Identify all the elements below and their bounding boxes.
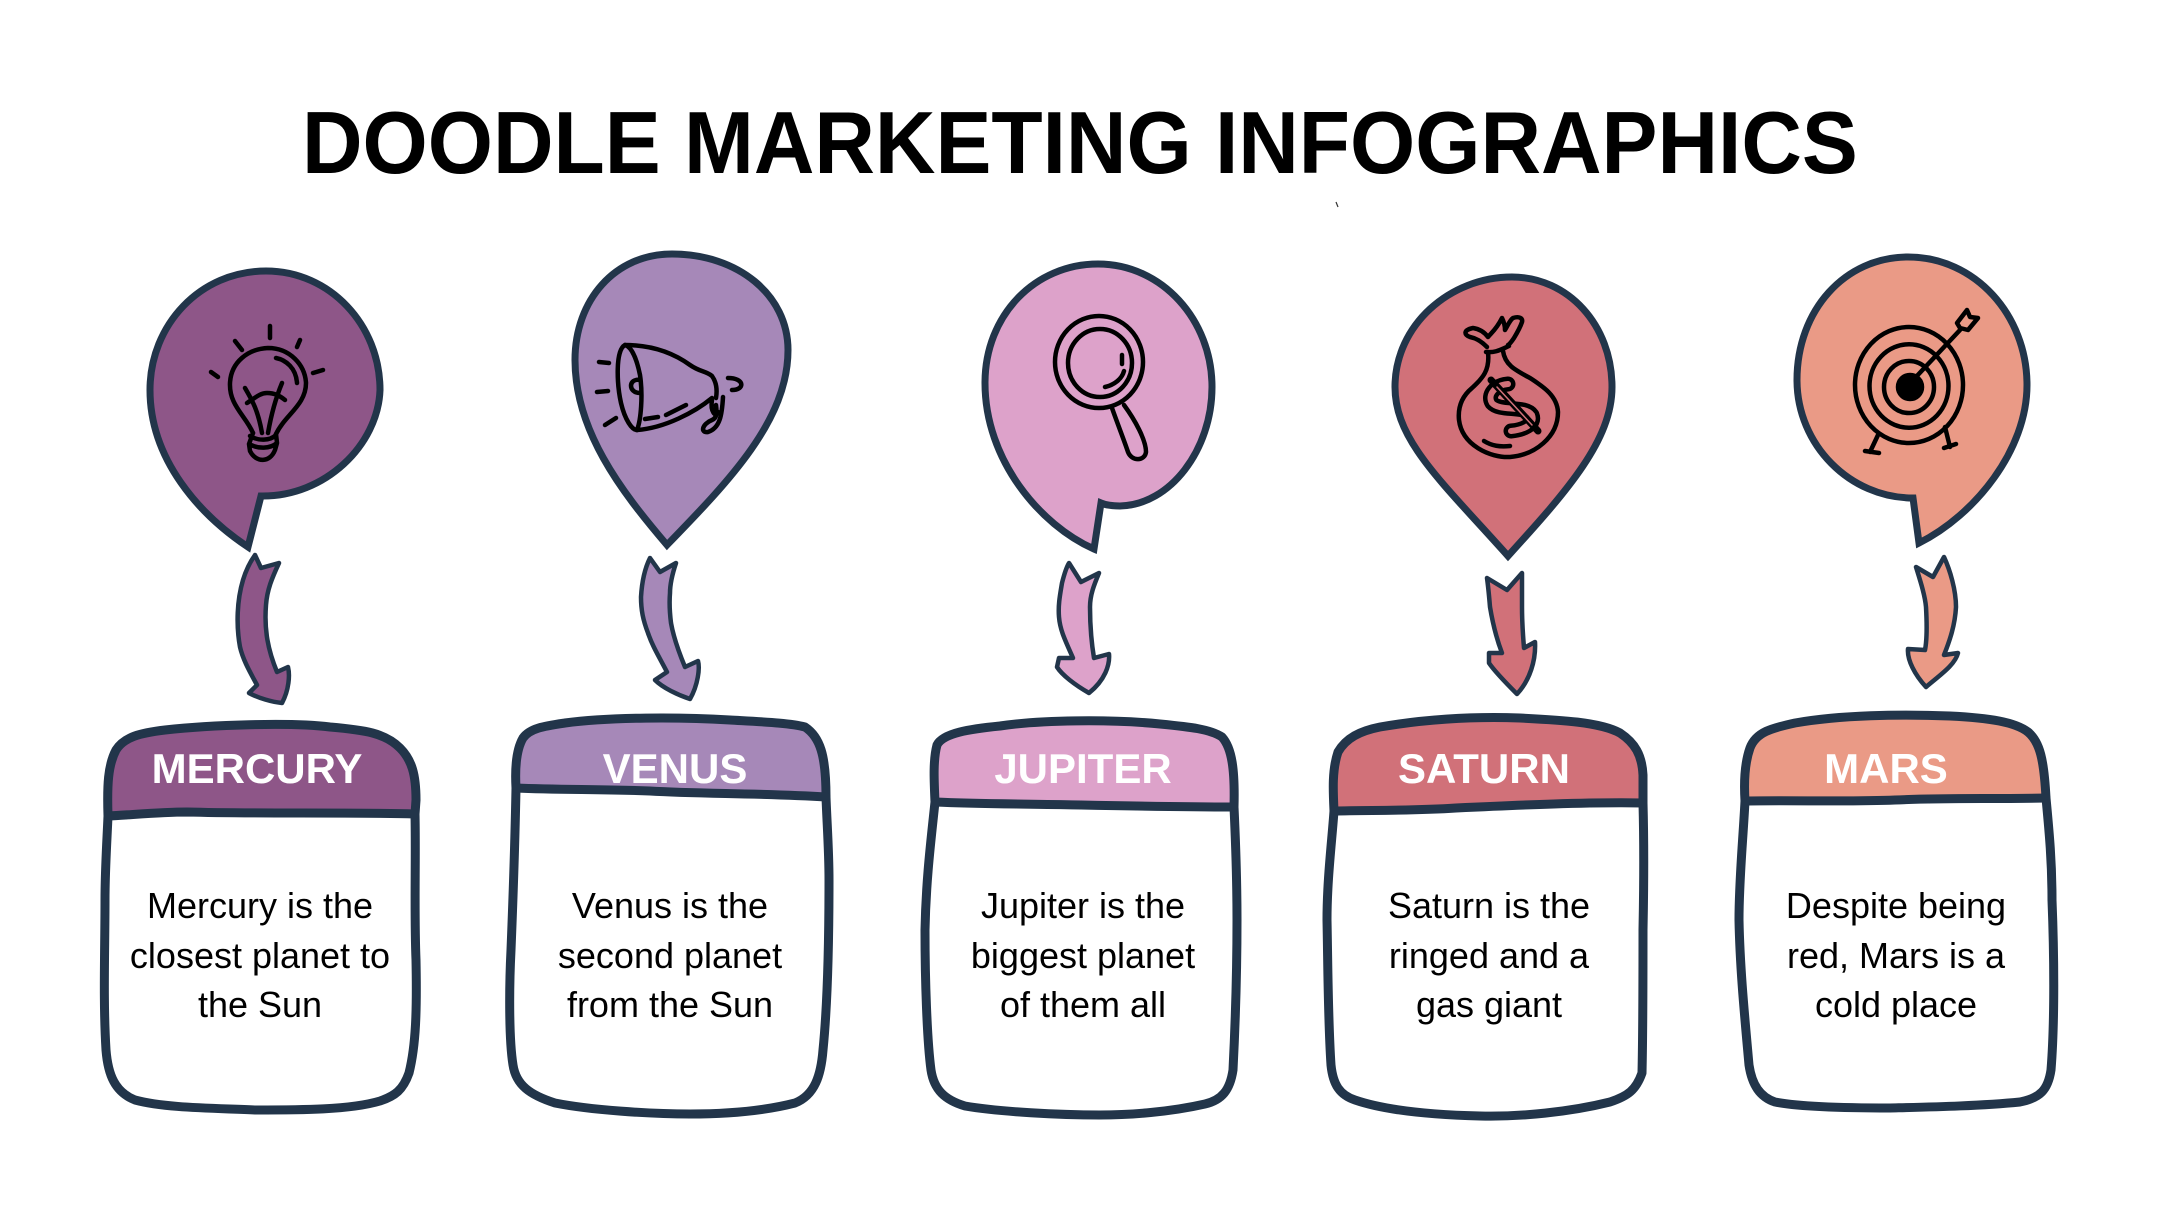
heading: Venus: VENUS (603, 745, 747, 792)
text: Mercury description: Mercury is the (147, 885, 373, 926)
column: Venus (510, 254, 829, 1114)
icon: money bag (1459, 317, 1558, 457)
text: Mars description: Despite being (1786, 885, 2006, 926)
arrow: Mars (1908, 557, 1958, 687)
heading: Jupiter: JUPITER (994, 745, 1172, 792)
column: Saturn (1327, 277, 1644, 1116)
text: Venus description: from the Sun (567, 984, 773, 1025)
text: Mars description: red, Mars is a (1787, 935, 2006, 976)
arrow: Saturn (1487, 573, 1535, 694)
text: Saturn description: gas giant (1416, 984, 1562, 1025)
icon: target with arrow (1855, 310, 1978, 453)
text: Jupiter description: Jupiter is the (981, 885, 1185, 926)
column: Jupiter (925, 264, 1237, 1115)
card: Venus (510, 718, 829, 1114)
arrow: Venus (641, 558, 699, 699)
heading: Saturn: SATURN (1398, 745, 1570, 792)
card: Mars (1739, 715, 2054, 1108)
arrow: Mercury (238, 555, 289, 703)
icon: light bulb (211, 326, 323, 460)
pin: Mercury (150, 271, 380, 547)
card: Jupiter (925, 721, 1237, 1115)
pin: Mars (1797, 257, 2027, 543)
text: Venus description: Venus is the (572, 885, 768, 926)
pin: Venus (575, 254, 788, 545)
icon: megaphone (597, 345, 741, 432)
pin: Saturn (1395, 277, 1612, 556)
icon: magnifying glass (1055, 316, 1146, 459)
title: DOODLE MARKETING INFOGRAPHICS (302, 94, 1858, 192)
text: Jupiter description: biggest planet (971, 935, 1195, 976)
text: Mars description: cold place (1815, 984, 1977, 1025)
column: Mars (1739, 257, 2054, 1108)
column: Mercury (104, 271, 416, 1110)
arrow: Jupiter (1057, 563, 1109, 693)
heading: Mercury: MERCURY (152, 745, 362, 792)
text: Venus description: second planet (558, 935, 782, 976)
card: Mercury (104, 724, 416, 1110)
text: Mercury description: closest planet to (130, 935, 390, 976)
text: Saturn description: ringed and a (1389, 935, 1590, 976)
card: Saturn (1327, 717, 1644, 1116)
heading: Mars: MARS (1824, 745, 1948, 792)
pin: Jupiter (985, 264, 1212, 549)
text: Jupiter description: of them all (1000, 984, 1166, 1025)
text: Mercury description: the Sun (198, 984, 322, 1025)
text: Saturn description: Saturn is the (1388, 885, 1590, 926)
